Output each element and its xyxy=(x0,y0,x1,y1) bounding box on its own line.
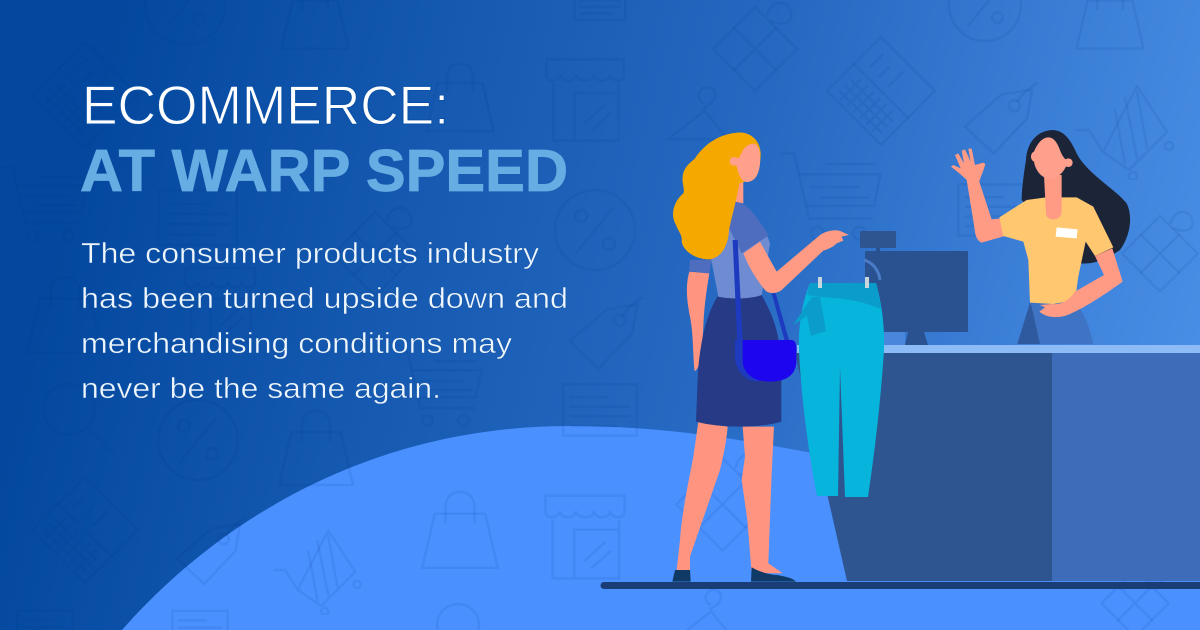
lower garment xyxy=(1017,302,1093,344)
torso xyxy=(710,203,770,299)
raised arm and hand xyxy=(951,149,1005,243)
right arm and hand xyxy=(1039,248,1123,317)
neck xyxy=(1044,175,1062,219)
back sleeve xyxy=(689,260,712,273)
title: ECOMMERCE: xyxy=(82,74,449,136)
customer woman xyxy=(672,133,849,582)
neck xyxy=(735,178,743,203)
back leg xyxy=(677,422,728,570)
ear xyxy=(1064,158,1073,167)
clips xyxy=(818,277,822,288)
hair xyxy=(673,133,761,259)
lower garment shade xyxy=(1017,303,1040,344)
cash register xyxy=(860,231,968,345)
description text: never be the same again. xyxy=(81,373,441,405)
front leg xyxy=(742,427,783,573)
description text: The consumer products industry xyxy=(81,238,540,270)
tie xyxy=(793,297,826,336)
hanger hook xyxy=(864,260,880,280)
hill shape xyxy=(122,426,1200,630)
shopkeeper woman xyxy=(951,130,1130,344)
title: AT WARP SPEED xyxy=(80,138,568,204)
bag strap xyxy=(733,240,790,343)
name tag xyxy=(1056,227,1078,238)
floor line xyxy=(601,582,1200,589)
description text: has been turned upside down and xyxy=(81,283,568,315)
shoes xyxy=(672,567,796,582)
face xyxy=(734,144,760,182)
face xyxy=(1031,137,1067,178)
sleeve xyxy=(727,202,768,253)
skirt xyxy=(696,295,781,427)
trousers body xyxy=(799,283,884,497)
front arm and hand xyxy=(743,230,849,293)
description text: merchandising conditions may xyxy=(81,328,513,360)
ear xyxy=(730,157,738,166)
hanging trousers xyxy=(793,260,884,497)
back arm xyxy=(687,272,709,371)
waistband xyxy=(807,283,881,309)
checkout counter xyxy=(795,345,1200,581)
title xyxy=(80,74,568,204)
handbag xyxy=(735,340,760,381)
hair xyxy=(1022,130,1130,263)
shirt xyxy=(999,197,1113,304)
description text xyxy=(81,238,568,405)
